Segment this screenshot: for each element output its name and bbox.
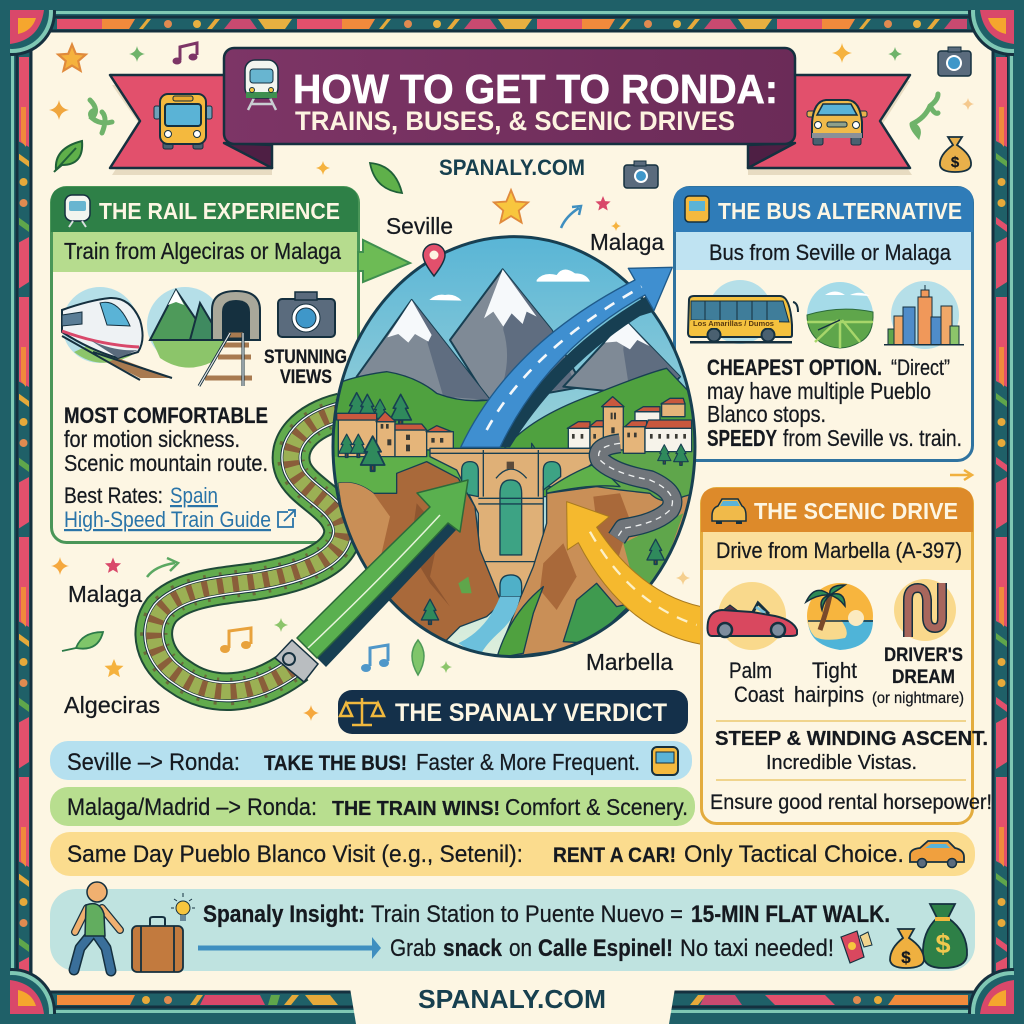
- stunning views label: STUNNING: [264, 347, 347, 368]
- icon: bus: [688, 280, 798, 344]
- icon: snack: [841, 931, 872, 963]
- icon: suitcase: [132, 917, 183, 972]
- bus body text: Blanco stops.: [707, 401, 826, 427]
- verdict row: Seville: [50, 741, 692, 780]
- icon captions: [729, 645, 964, 707]
- insight text: snack: [443, 935, 503, 962]
- icon: money bags: $: [901, 948, 911, 967]
- drive header: [701, 488, 973, 532]
- scene background: sky, mountains, hills: [330, 230, 700, 660]
- drive subheader: [703, 532, 971, 570]
- title text: TRAINS, BUSES, & SCENIC DRIVES: [295, 106, 735, 136]
- place labels: [64, 213, 673, 718]
- scene foreground: town, bridge, cliffs, river: [330, 393, 703, 658]
- insight text: Calle Espinel!: [538, 935, 673, 962]
- footer site name: SPANALY.COM: [418, 984, 606, 1014]
- icon: small bus: [685, 196, 709, 222]
- drive header: THE SCENIC DRIVE: [754, 498, 958, 524]
- insight text: Spanaly Insight:: [203, 901, 365, 928]
- icon: money bags: [890, 904, 967, 968]
- verdict row: Malaga: [50, 787, 695, 826]
- panel: scenic drive: [701, 488, 992, 824]
- rail body text: [64, 403, 295, 532]
- rail body text: Best Rates:: [64, 483, 163, 508]
- central scene: Puente Nuevo globe: [330, 230, 703, 660]
- rail body text: for motion sickness.: [64, 426, 240, 452]
- icon: train: [245, 60, 278, 110]
- rail body text: MOST COMFORTABLE: [64, 403, 268, 428]
- icon: red convertible: [708, 582, 797, 650]
- bus body text: “Direct”: [891, 355, 950, 380]
- place labels: Algeciras: [64, 692, 160, 718]
- title text: HOW TO GET TO RONDA:: [293, 66, 778, 112]
- icon: light bulb: [171, 893, 195, 921]
- drive body text: Ensure good rental horsepower!: [710, 791, 992, 814]
- icon: small train: [65, 195, 90, 227]
- insight text: [203, 901, 890, 962]
- icon: mountains and tunnel: [147, 287, 260, 386]
- bridge: [430, 443, 597, 597]
- arrow: walk: [198, 937, 381, 959]
- right town: [567, 397, 692, 453]
- icon captions: DREAM: [892, 667, 955, 688]
- place labels: Seville: [386, 213, 453, 239]
- icon captions: Tight: [812, 658, 857, 683]
- decorations: top corners: $: [951, 154, 960, 171]
- icon captions: hairpins: [794, 682, 864, 707]
- verdict row: Malaga: THE TRAIN WINS!: [332, 798, 500, 820]
- verdict row: Seville: TAKE THE BUS!: [264, 752, 407, 775]
- icon captions: Coast: [734, 682, 784, 707]
- rail body text: Spain: [170, 483, 218, 508]
- river: [458, 597, 520, 657]
- icon: hairpin road: [894, 579, 956, 641]
- insight panel: [50, 882, 975, 972]
- drive body text: [710, 720, 992, 814]
- panel: bus alternative: [674, 187, 973, 460]
- icon: map pin: [423, 244, 445, 276]
- title ribbon left: [110, 75, 272, 175]
- winding road: [599, 443, 672, 538]
- verdict row: same day: Only Tactical Choice.: [684, 841, 904, 868]
- icon: city: [884, 281, 964, 349]
- arrow: blue bus route: [461, 267, 672, 447]
- icon: bus: [154, 94, 212, 149]
- icon: small car: [712, 499, 746, 524]
- icon captions: DRIVER'S: [884, 645, 963, 666]
- icon: high-speed train: [62, 287, 172, 380]
- bus subheader: [676, 232, 971, 270]
- title banner: [224, 48, 795, 144]
- icon: walking person: [74, 882, 120, 971]
- decorations: lower left: [51, 557, 452, 721]
- stunning views label: [264, 347, 347, 388]
- icon: scales: [340, 698, 384, 725]
- verdict heading: THE SPANALY VERDICT: [395, 699, 667, 727]
- insight text: Grab: [390, 935, 436, 962]
- insight text: 15-MIN FLAT WALK.: [691, 901, 890, 928]
- bus body text: SPEEDY: [707, 425, 777, 451]
- icon: camera: [278, 292, 335, 337]
- rail track: [154, 412, 343, 692]
- arrow: yellow drive route: [567, 502, 701, 644]
- right cliff: [497, 487, 695, 658]
- drive body text: Incredible Vistas.: [766, 752, 917, 774]
- title ribbon right: [748, 75, 912, 175]
- icon: money bags: $: [935, 929, 951, 959]
- bus body text: CHEAPEST OPTION.: [707, 355, 882, 380]
- rail body text: High-Speed Train Guide: [64, 507, 271, 532]
- title text: [293, 66, 778, 136]
- bus body text: [707, 355, 962, 451]
- track joint: [275, 640, 318, 682]
- insight text: No taxi needed!: [680, 935, 834, 962]
- bus body text: may have multiple Pueblo: [707, 378, 931, 404]
- drive body text: STEEP & WINDING ASCENT.: [715, 728, 988, 750]
- arrow: green rail route: [275, 480, 468, 682]
- verdict row: Seville: Faster & More Frequent.: [416, 749, 640, 775]
- left town: [337, 412, 453, 457]
- drive subheader: Drive from Marbella (A-397): [716, 538, 962, 563]
- verdict row: same day: Same Day Pueblo Blanco Visit (e.g., Setenil):: [67, 841, 523, 868]
- icon: bus: Los Amarillas / Dumos: [693, 319, 774, 328]
- insight text: Train Station to Puente Nuevo =: [371, 901, 683, 928]
- bus subheader: Bus from Seville or Malaga: [709, 240, 952, 265]
- insight text: on: [509, 935, 532, 962]
- arrow: rail panel to globe: [358, 240, 410, 282]
- icon captions: (or nightmare): [872, 690, 964, 707]
- icon: bus: [652, 747, 678, 775]
- place labels: Malaga: [68, 581, 142, 607]
- rail body text: Scenic mountain route.: [64, 450, 268, 476]
- left cliff: [338, 462, 502, 647]
- verdict row: same day: RENT A CAR!: [553, 844, 676, 867]
- decorations: middle top: [316, 161, 972, 585]
- place labels: Marbella: [586, 649, 673, 675]
- place labels: Malaga: [590, 229, 664, 255]
- icon: palm beach: [806, 583, 873, 650]
- icon: car: [807, 100, 867, 145]
- bus header: [674, 187, 973, 232]
- verdict row: same day: [50, 832, 975, 876]
- stunning views label: VIEWS: [280, 367, 332, 388]
- site name: SPANALY.COM: [439, 155, 585, 180]
- bus body text: from Seville vs. train.: [783, 425, 962, 451]
- rail header: [51, 187, 358, 232]
- icon: farm fields: [807, 282, 873, 348]
- verdict row: Malaga: Malaga/Madrid –> Ronda:: [67, 794, 317, 821]
- verdict row: Malaga: Comfort & Scenery.: [505, 794, 688, 820]
- verdict row: Seville: Seville –> Ronda:: [67, 749, 240, 776]
- bus header: THE BUS ALTERNATIVE: [718, 198, 962, 224]
- icon captions: Palm: [729, 658, 772, 683]
- rail header: THE RAIL EXPERIENCE: [99, 198, 340, 224]
- rail subheader: [53, 232, 357, 272]
- icon: car: [910, 841, 964, 868]
- rail subheader: Train from Algeciras or Malaga: [64, 238, 341, 264]
- verdict heading: [338, 690, 688, 734]
- decorations: top corners: [49, 43, 974, 172]
- panel: rail experience: [51, 187, 410, 542]
